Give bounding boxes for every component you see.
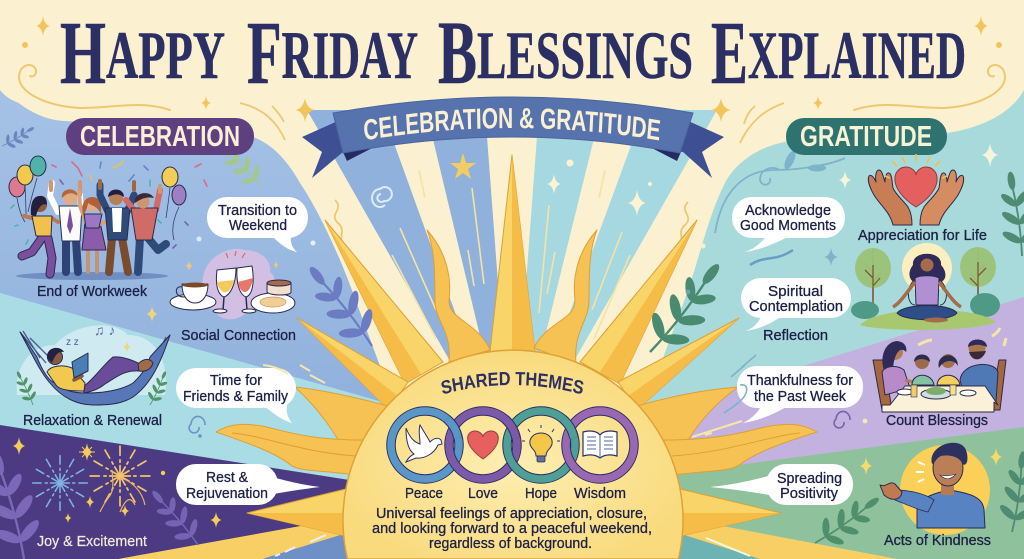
heading pill: Celebration: CELEBRATION <box>80 121 240 153</box>
label: Count Blessings: Count Blessings <box>886 412 988 429</box>
decorative items in central stripes <box>335 153 688 339</box>
label: Social Connection: Social Connection <box>181 327 296 344</box>
person 2 <box>50 182 82 272</box>
title: H <box>60 4 106 103</box>
illustration: hands holding heart <box>868 154 964 225</box>
interlocking theme rings <box>391 411 634 479</box>
title: APPY <box>106 17 225 93</box>
ribbon banner: Celebration & Gratitude: CELEBRATION & GRATITUDE <box>364 108 660 140</box>
small decorations <box>189 244 867 438</box>
speech bubble: Thankfulness for the Past Week: the Past Week <box>754 388 846 405</box>
speech bubble: Spreading Positivity <box>710 464 853 505</box>
speech bubble: Transition to Weekend: Weekend <box>229 217 287 234</box>
speech bubble: Time for Friends & Family: Friends & Family <box>183 388 288 405</box>
speech bubble: Rest & Rejuvenation <box>176 464 320 505</box>
speech bubble: Acknowledge Good Moments: Acknowledge <box>745 202 831 219</box>
ribbon banner: Celebration & Gratitude <box>302 96 724 178</box>
speech bubble: Spiritual Contemplation: Spiritual <box>768 283 823 300</box>
title: E <box>711 4 748 103</box>
icon: open book (Wisdom) <box>583 431 617 458</box>
heading pill: Gratitude: GRATITUDE <box>800 121 932 153</box>
label: Reflection: Reflection <box>763 327 828 344</box>
person 5 <box>126 186 166 272</box>
summary text: Universal feelings of appreciation, closure, <box>376 505 647 522</box>
speech bubble: Time for Friends & Family <box>176 368 296 423</box>
background: left panel bands <box>0 90 400 559</box>
bottom gold bands <box>118 518 897 559</box>
title: F <box>247 4 282 103</box>
heading pill: Celebration <box>66 118 254 155</box>
title: RIDAY <box>282 17 418 93</box>
label: Joy & Excitement: Joy & Excitement <box>37 533 148 550</box>
icon: dove (Peace) <box>406 425 442 462</box>
illustration: fireworks <box>13 437 222 528</box>
leaf branches <box>0 121 1024 559</box>
label: Love: Love <box>468 485 498 502</box>
speech bubble: Transition to Weekend <box>207 197 308 252</box>
sun rays <box>216 155 817 537</box>
title <box>60 4 966 103</box>
Shared Themes curved heading: SHARED THEMES <box>441 372 584 394</box>
label: End of Workweek: End of Workweek <box>37 283 147 300</box>
summary text <box>372 505 652 552</box>
label: Appreciation for Life: Appreciation for Life <box>858 227 987 244</box>
illustration: office party group with balloons and confetti <box>9 156 207 280</box>
person 4 <box>100 181 134 272</box>
illustration: person in hammock with book: ♫ ♪ <box>94 322 115 338</box>
speech bubble: Rest & Rejuvenation: Rejuvenation <box>186 485 268 502</box>
illustration: person in hammock with book <box>10 306 174 409</box>
icon: light bulb (Hope) <box>522 425 560 462</box>
illustration: person in hammock with book: z z <box>66 337 79 348</box>
label: Peace: Peace <box>405 485 443 502</box>
speech bubble: Spreading Positivity: Spreading <box>777 470 842 487</box>
background: central radiating stripes <box>307 110 717 470</box>
speech bubble: Spreading Positivity: Positivity <box>780 485 838 502</box>
speech bubble: Acknowledge Good Moments: Good Moments <box>740 217 836 234</box>
speech bubble: Thankfulness for the Past Week <box>737 366 863 423</box>
summary text: regardless of background. <box>429 535 592 552</box>
speech bubble: Spiritual Contemplation: Contemplation <box>749 298 843 315</box>
illustration: family meal <box>873 328 1006 412</box>
label: Wisdom: Wisdom <box>574 485 626 502</box>
illustration: smiling man gesturing <box>860 443 1002 535</box>
Shared Themes curved heading <box>441 372 584 394</box>
speech bubble: Transition to Weekend: Transition to <box>218 202 297 219</box>
summary text: and looking forward to a peaceful weekend, <box>372 520 652 537</box>
speech bubble: Acknowledge Good Moments <box>732 197 845 252</box>
speech bubble: Time for Friends & Family: Time for <box>210 372 262 389</box>
icon: heart (Love) <box>468 431 498 459</box>
person 1 <box>22 196 58 274</box>
label: Hope: Hope <box>525 485 557 502</box>
label: Acts of Kindness: Acts of Kindness <box>884 532 991 549</box>
speech bubble: Rest & Rejuvenation: Rest & <box>206 469 248 486</box>
illustration: cup, wine glasses and plates <box>170 236 316 319</box>
person 3 <box>79 192 116 272</box>
background: right panel bands <box>620 90 1024 559</box>
decorative swirls and stars at top <box>19 16 1005 143</box>
speech bubble: Spiritual Contemplation <box>741 278 851 331</box>
label: Relaxation & Renewal: Relaxation & Renewal <box>23 412 162 429</box>
illustration: meditation in nature <box>851 243 1000 330</box>
title: B <box>438 4 477 103</box>
title: LESSINGS <box>477 17 693 93</box>
sun disc <box>343 350 683 559</box>
speech bubble: Thankfulness for the Past Week: Thankfulness for <box>747 372 853 389</box>
